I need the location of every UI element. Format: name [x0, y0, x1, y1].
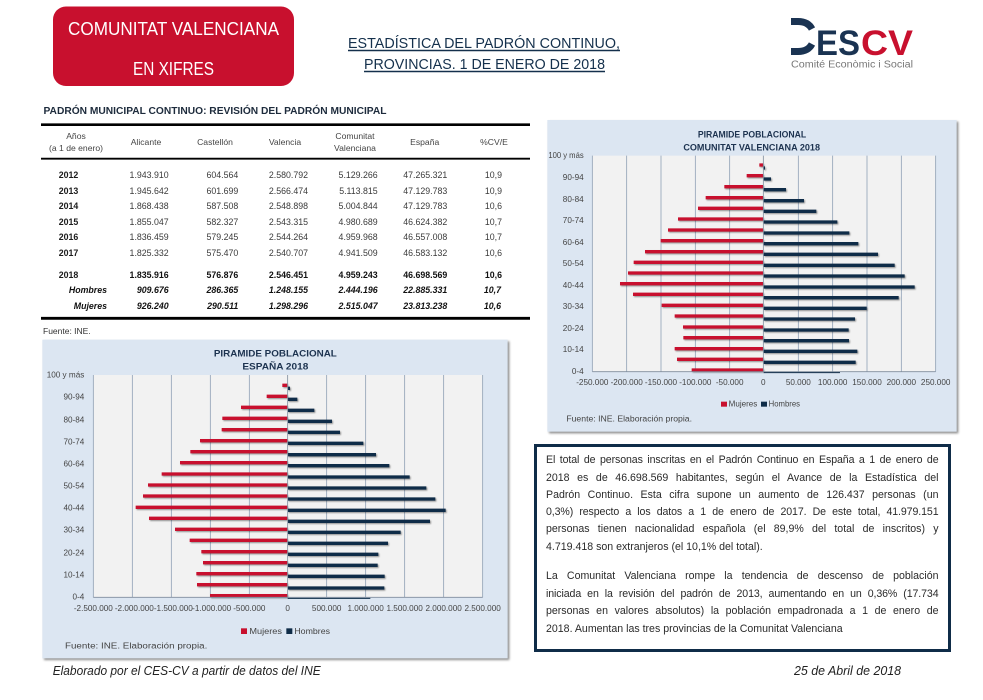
row 2012: 2.580.792: [269, 170, 308, 180]
population axis labels Comunitat Valenciana: 50.000: [786, 378, 811, 387]
row 2012: 10,9: [485, 170, 502, 180]
row Mujeres: 926.240: [137, 301, 169, 311]
row Hombres: [69, 285, 502, 295]
source note Spain: Fuente: INE. Elaboración propia.: [65, 642, 207, 651]
table header row: %CV/E: [480, 137, 508, 147]
row Hombres: 2.444.196: [338, 285, 378, 295]
row Hombres: 22.885.331: [402, 285, 447, 295]
main heading: [348, 35, 620, 73]
population axis labels Comunitat Valenciana: 150.000: [852, 378, 882, 387]
row 2012: 2012: [59, 170, 78, 180]
row Mujeres: Mujeres: [74, 301, 107, 311]
population axis labels Comunitat Valenciana: -150.000: [645, 378, 678, 387]
logo: CES-CV: CV: [861, 24, 914, 63]
row 2017: 46.583.132: [403, 248, 447, 258]
population axis labels Spain: 0: [285, 604, 290, 613]
row 2013: 2.566.474: [269, 186, 308, 196]
age axis labels Comunitat Valenciana: 70-74: [563, 216, 584, 225]
age axis labels Spain: 90-94: [63, 393, 85, 402]
text box: commentary: El total de personas inscritas en el Padrón Continuo en España a 1 de enero de: [546, 454, 938, 466]
text box: commentary: 2018. Aumentan las tres provincias de la Comunitat Valenciana: [546, 622, 843, 634]
row 2016: [59, 232, 502, 242]
main heading: PROVINCIAS. 1 DE ENERO DE 2018: [364, 56, 605, 73]
population axis labels Comunitat Valenciana: -200.000: [611, 378, 643, 387]
population axis labels Comunitat Valenciana: [576, 378, 951, 387]
row 2016: 2016: [59, 232, 78, 242]
population axis labels Spain: -2.000.000: [115, 604, 154, 613]
population axis labels Spain: -1.000.000: [192, 604, 232, 613]
population axis labels Spain: 2.500.000: [465, 604, 501, 613]
population axis labels Spain: [74, 604, 501, 613]
population axis labels Spain: 1.000.000: [348, 604, 384, 613]
text box: commentary: 4.719.418 son extranjeros (el 10,1% del total).: [546, 540, 763, 552]
legend Comunitat Valenciana: [721, 400, 800, 409]
row 2014: [59, 201, 502, 211]
age axis labels Spain: 80-84: [63, 416, 85, 425]
row Mujeres: 23.813.238: [402, 301, 447, 311]
row Hombres: 286.365: [205, 285, 238, 295]
table header row: España: [410, 137, 439, 147]
row 2015: 46.624.382: [403, 217, 447, 227]
row Hombres: 1.248.155: [269, 285, 308, 295]
age axis labels Spain: 40-44: [63, 504, 85, 513]
text box: commentary: iniciada en la revisión del padrón de 2013, aumentando en un 0,36% (17.734: [546, 588, 938, 600]
age axis labels Spain: 60-64: [63, 460, 85, 469]
row 2013: 47.129.783: [403, 186, 447, 196]
row 2013: 1.945.642: [130, 186, 169, 196]
row 2015: 1.855.047: [130, 217, 169, 227]
title badge: Comunitat Valenciana en xifres: EN XIFRES: [133, 59, 214, 79]
row 2013: 601.699: [206, 186, 238, 196]
age axis labels Spain: 30-34: [63, 526, 85, 535]
row Hombres: Hombres: [69, 285, 107, 295]
table heading: PADRÓN MUNICIPAL CONTINUO: REVISIÓN DEL PADRÓN MUNICIPAL: [44, 104, 387, 117]
row 2015: 582.327: [206, 217, 238, 227]
row 2016: 46.557.008: [403, 232, 447, 242]
row 2018: 576.876: [206, 270, 238, 280]
text box: commentary: Padrón Continuo. Esta cifra supone un aumento de 126.437 personas (un: [546, 488, 938, 500]
table header row: Años: [66, 131, 86, 141]
text box: commentary: personas en valores absolutos) la población empadronada a 1 de enero de: [546, 605, 938, 617]
footer credit: Elaborado por el CES-CV a partir de datos del INE: [53, 664, 321, 678]
table header row: Comunitat: [335, 131, 375, 141]
row 2017: 4.941.509: [339, 248, 378, 258]
age axis labels Spain: 10-14: [63, 571, 85, 580]
legend Spain: [241, 627, 330, 636]
table header row: Valenciana: [334, 143, 376, 153]
row 2012: 604.564: [206, 170, 238, 180]
legend Spain: Hombres: [294, 627, 330, 636]
table header row: [49, 131, 508, 153]
text box: commentary: La Comunitat Valenciana rompe la tendencia de descenso de población: [546, 570, 938, 582]
row 2014: 587.508: [206, 201, 238, 211]
data table: padrón municipal: [41, 125, 530, 318]
age axis labels Spain: 0-4: [73, 593, 85, 602]
age axis labels Comunitat Valenciana: 40-44: [563, 281, 584, 290]
age axis labels Comunitat Valenciana: 50-54: [563, 259, 584, 268]
row Hombres: 10,7: [484, 285, 502, 295]
table header row: (a 1 de enero): [49, 143, 103, 153]
row Mujeres: [74, 301, 501, 311]
row 2015: 10,7: [485, 217, 502, 227]
row 2016: 2.544.264: [269, 232, 308, 242]
row 2014: 2014: [59, 201, 78, 211]
title badge: Comunitat Valenciana en xifres: COMUNITAT VALENCIANA: [68, 19, 279, 39]
age axis labels Comunitat Valenciana: 80-84: [563, 195, 584, 204]
age axis labels Comunitat Valenciana: 20-24: [563, 324, 584, 333]
chart title Spain: PIRAMIDE POBLACIONAL: [214, 349, 337, 359]
age axis labels Spain: 50-54: [63, 482, 85, 491]
row Mujeres: 1.298.296: [269, 301, 308, 311]
row 2017: [59, 248, 502, 258]
text box: commentary: personas tienen nacionalidad española (el 89,9% del total de inscritos) y: [546, 523, 938, 535]
source note Comunitat Valenciana: Fuente: INE. Elaboración propia.: [566, 415, 692, 424]
title badge: Comunitat Valenciana en xifres: [53, 6, 294, 86]
age axis labels Comunitat Valenciana: [548, 151, 584, 376]
age axis labels Comunitat Valenciana: 100 y más: [548, 151, 584, 160]
population axis labels Spain: 1.500.000: [387, 604, 423, 613]
logo: CES-CV: ES: [816, 24, 860, 63]
chart title Comunitat Valenciana: COMUNITAT VALENCIANA 2018: [683, 143, 820, 153]
row 2017: 1.825.332: [130, 248, 169, 258]
text box: commentary: 2018 es de 46.698.569 habitantes, según el Avance de la Estadística del: [546, 472, 938, 484]
footer date: 25 de Abril de 2018: [793, 664, 901, 678]
row 2018: 2.546.451: [269, 270, 308, 280]
row 2012: [59, 170, 502, 180]
legend Comunitat Valenciana: Mujeres: [729, 400, 757, 409]
population axis labels Comunitat Valenciana: 200.000: [887, 378, 917, 387]
bars: hombres Comunitat Valenciana: [764, 168, 915, 362]
population axis labels Spain: -500.000: [233, 604, 266, 613]
row 2013: [59, 186, 502, 196]
row 2018: 1.835.916: [130, 270, 169, 280]
table source note: Fuente: INE.: [43, 326, 91, 336]
population axis labels Comunitat Valenciana: -100.000: [679, 378, 712, 387]
population axis labels Spain: -2.500.000: [74, 604, 113, 613]
row 2013: 5.113.815: [339, 186, 378, 196]
row Mujeres: 2.515.047: [338, 301, 379, 311]
population axis labels Spain: 2.000.000: [426, 604, 462, 613]
text box: commentary: [534, 444, 951, 652]
row 2015: 2.543.315: [269, 217, 308, 227]
age axis labels Comunitat Valenciana: 30-34: [563, 302, 584, 311]
row 2016: 1.836.459: [130, 232, 169, 242]
text box: commentary: 0,3%) respecto a los datos a 1 de enero de 2017. De este total, 41.979.151: [546, 506, 938, 518]
population axis labels Spain: 500.000: [312, 604, 342, 613]
chart title Comunitat Valenciana: [683, 129, 820, 153]
row 2016: 579.245: [206, 232, 238, 242]
row 2018: [59, 270, 502, 280]
bars: mujeres Spain: [136, 385, 287, 596]
main heading: ESTADÍSTICA DEL PADRÓN CONTINUO,: [348, 35, 620, 52]
row 2012: 5.129.266: [339, 170, 378, 180]
age axis labels Comunitat Valenciana: 60-64: [563, 238, 584, 247]
row 2014: 47.129.783: [403, 201, 447, 211]
age axis labels Comunitat Valenciana: 10-14: [563, 345, 584, 354]
row 2017: 575.470: [206, 248, 238, 258]
age axis labels Spain: [47, 371, 85, 602]
age axis labels Spain: 70-74: [63, 438, 85, 447]
population axis labels Comunitat Valenciana: 0: [761, 378, 766, 387]
row 2014: 5.004.844: [339, 201, 378, 211]
row 2013: 2013: [59, 186, 78, 196]
row 2016: 4.959.968: [339, 232, 378, 242]
legend Comunitat Valenciana: Hombres: [769, 400, 800, 409]
table header row: Valencia: [269, 137, 301, 147]
row 2017: 2017: [59, 248, 78, 258]
logo: CES-CV: Comité Econòmic i Social: [791, 60, 913, 70]
legend Spain: Mujeres: [249, 627, 282, 636]
row 2012: 1.943.910: [130, 170, 169, 180]
population axis labels Comunitat Valenciana: 100.000: [818, 378, 848, 387]
row Mujeres: 10,6: [484, 301, 501, 311]
panel: population pyramid Spain: [42, 340, 508, 658]
age axis labels Spain: 20-24: [63, 549, 85, 558]
row 2012: 47.265.321: [403, 170, 447, 180]
population axis labels Comunitat Valenciana: -250.000: [576, 378, 609, 387]
row 2018: 46.698.569: [403, 270, 447, 280]
panel: population pyramid Comunitat Valenciana: [547, 120, 957, 432]
logo: CES-CV: [791, 22, 914, 70]
row 2017: 10,6: [485, 248, 502, 258]
population axis labels Spain: -1.500.000: [154, 604, 193, 613]
population axis labels Comunitat Valenciana: -50.000: [716, 378, 744, 387]
table header row: Alicante: [131, 137, 162, 147]
row 2015: 4.980.689: [339, 217, 378, 227]
row 2018: 10,6: [485, 270, 502, 280]
table header row: Castellón: [197, 137, 233, 147]
row 2013: 10,9: [485, 186, 502, 196]
row Mujeres: 290.511: [206, 301, 238, 311]
row 2015: [59, 217, 502, 227]
row 2014: 1.868.438: [130, 201, 169, 211]
bars: mujeres Comunitat Valenciana: [620, 165, 763, 370]
chart title Comunitat Valenciana: PIRAMIDE POBLACIONAL: [698, 129, 807, 139]
row 2015: 2015: [59, 217, 78, 227]
bars: hombres Spain: [288, 388, 446, 588]
population axis labels Comunitat Valenciana: 250.000: [921, 378, 951, 387]
row 2017: 2.540.707: [269, 248, 308, 258]
row 2014: 2.548.898: [269, 201, 308, 211]
chart title Spain: [214, 349, 337, 372]
age axis labels Spain: 100 y más: [47, 371, 84, 380]
row Hombres: 909.676: [137, 285, 169, 295]
row 2014: 10,6: [485, 201, 502, 211]
row 2018: 4.959.243: [339, 270, 378, 280]
age axis labels Comunitat Valenciana: 90-94: [563, 173, 584, 182]
age axis labels Comunitat Valenciana: 0-4: [572, 367, 584, 376]
row 2018: 2018: [59, 270, 78, 280]
chart title Spain: ESPAÑA 2018: [242, 362, 308, 372]
row 2016: 10,7: [485, 232, 502, 242]
